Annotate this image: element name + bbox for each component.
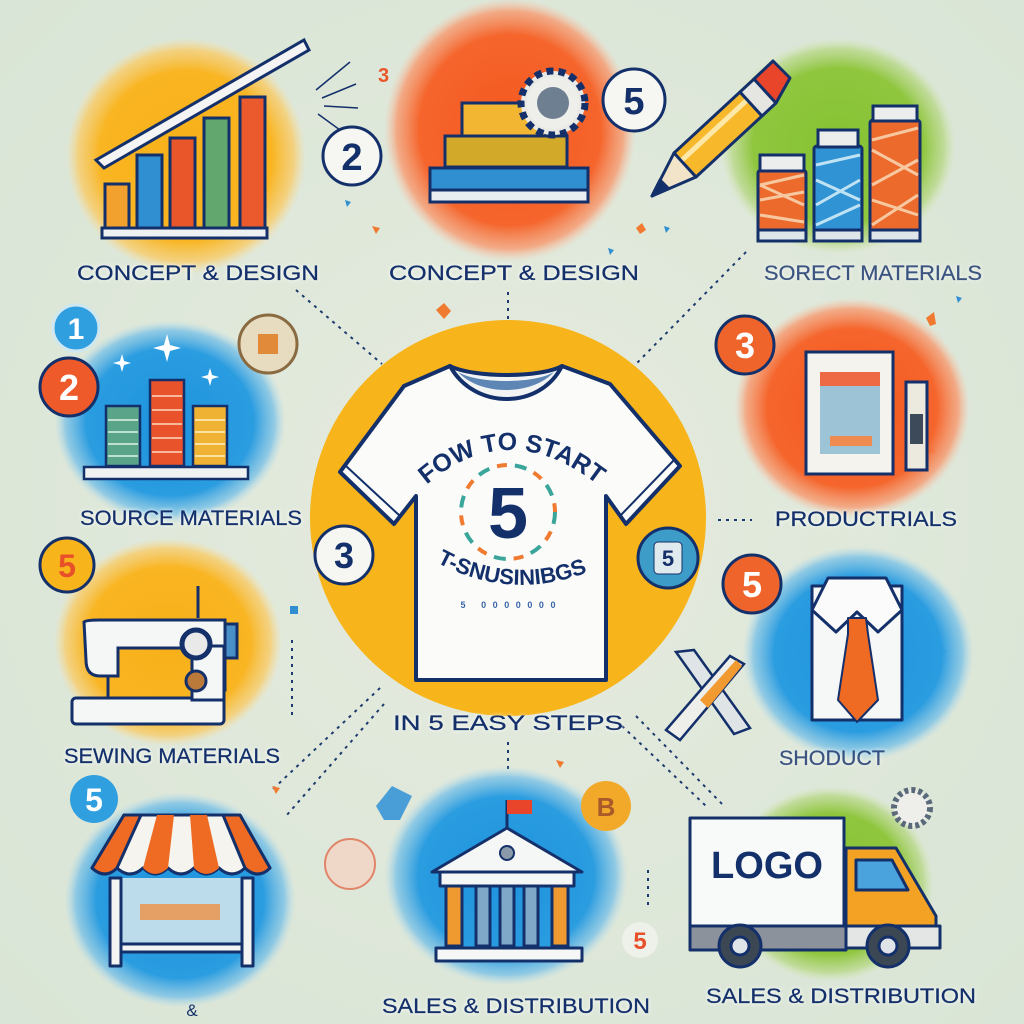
connector lines [272,252,752,906]
heading: source materials: SOURCE MATERIALS [80,507,302,530]
icon: gear [521,71,585,135]
panel: delivery truck [690,786,940,982]
badge: number 2 top: 2 [341,137,363,179]
badge: number 5 top [603,69,665,131]
icon: pencil [652,61,790,196]
badge: number 3 [716,316,774,374]
badge: number 1: 1 [68,313,84,346]
icon: sewing machine [72,586,237,724]
panel: spools with pencil [652,38,956,254]
panel: bank [325,766,658,986]
shirt text: FOW TO START [417,432,608,484]
badge: number 2 [40,358,98,416]
heading: product: SHODUCT [779,747,885,770]
icon: coin [239,315,297,373]
panel: storefront [64,775,296,1008]
icon: crossed tools [666,650,750,740]
badge: number 5 [638,528,698,588]
icon: shirt with tie [812,578,902,722]
shirt text: 5 [488,474,528,554]
heading: in 5 easy steps: IN 5 EASY STEPS [393,712,623,735]
badge: number 2 top [323,127,381,185]
panel: productrials [716,298,970,518]
small number 5: 5 [633,928,647,955]
badge: number 5 [723,555,781,613]
icon: bank building [432,800,582,961]
heading: step 2: CONCEPT & DESIGN [389,262,639,285]
badge: number 5: 5 [742,564,762,605]
small number 5 [622,922,658,958]
panel: center t-shirt [310,320,706,716]
icon: orange badge: B [597,792,615,822]
badge: number 3: 3 [334,535,354,576]
badge: number 2: 2 [59,367,79,408]
spools [758,106,920,241]
badge: number 1 [53,305,99,351]
shirt text: 5 0000000 [460,600,556,610]
badge: number 3 [315,526,373,584]
panel: sewing [40,538,282,746]
bar chart [96,40,309,238]
spools on shelf [84,380,248,479]
badge: number 3: 3 [735,325,755,366]
heading: ampersand: & [186,1001,198,1020]
stacked blocks [430,103,588,202]
icon: small coin [325,839,375,889]
badge: number 5 top: 5 [623,81,645,123]
text: logo: LOGO [711,845,823,887]
sparkles [113,334,219,386]
decorative confetti [272,200,962,794]
heading: step 1: CONCEPT & DESIGN [77,262,319,285]
icon: orange badge [581,781,631,831]
icon: storefront [92,815,270,966]
badge: number 5 [40,538,94,592]
yellow circle [310,320,706,716]
shirt text [417,432,608,610]
icon: truck [690,818,940,967]
heading: sales and distribution right: SALES & DISTRIBUTION [706,985,976,1008]
heading: productrials: PRODUCTRIALS [775,508,957,531]
panel: step 2 concept and design stack [384,0,636,262]
decorative spark lines [316,62,389,130]
background circle orange [66,38,306,274]
icon: poster [806,352,927,474]
badge: number 5: 5 [85,782,103,818]
decorative spark lines: 3 [378,65,389,87]
badge: number 5: 5 [662,546,674,571]
badge: number 5 [70,775,118,823]
heading: sorted materials: SORECT MATERIALS [764,262,982,285]
panel: source materials [40,305,297,524]
heading: sales and distribution left: SALES & DISTRIBUTION [382,995,650,1018]
t-shirt [340,366,680,680]
icon: blue shape [376,786,412,820]
shirt text: T-SNUSINIBGS [441,549,586,585]
panel: shirt and tie [666,546,974,762]
icon: gear [894,790,930,826]
badge: number 5: 5 [58,548,76,584]
heading: sewing materials: SEWING MATERIALS [64,745,280,768]
panel: step 1 concept and design chart [66,38,309,274]
